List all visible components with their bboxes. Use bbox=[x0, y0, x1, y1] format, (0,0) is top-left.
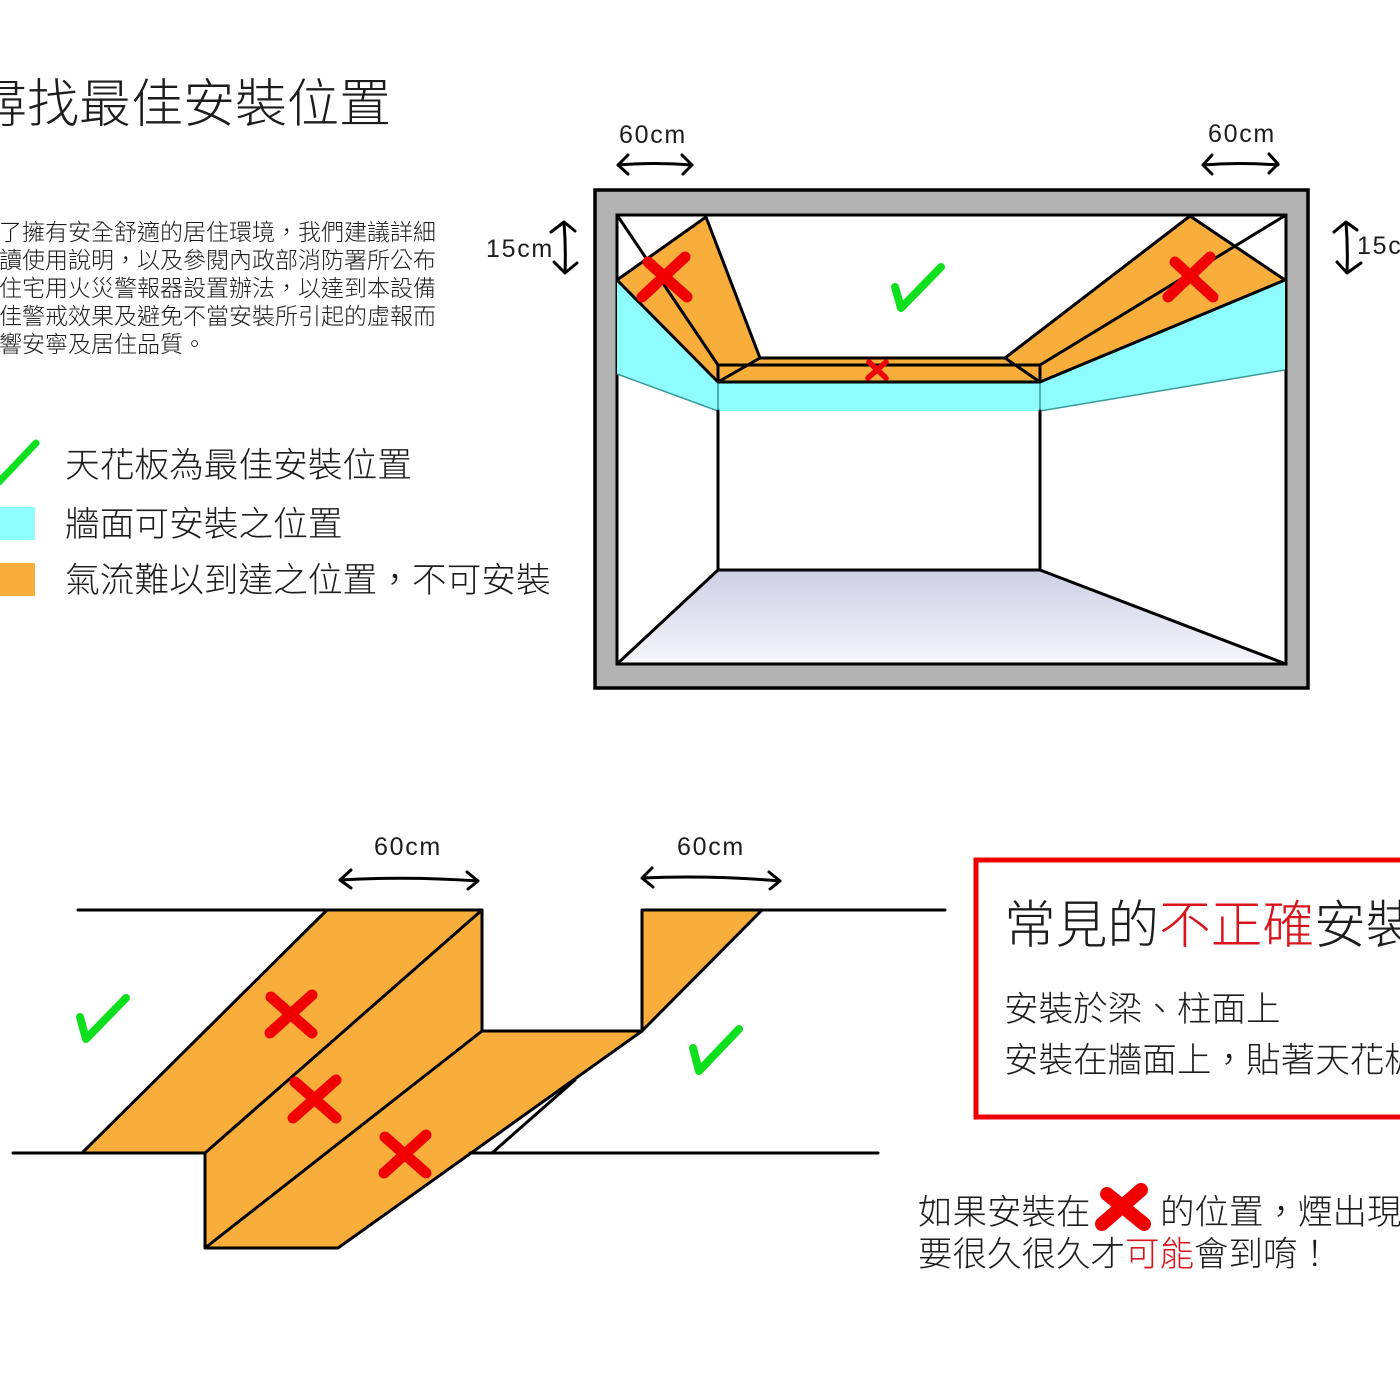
icon: check left bbox=[80, 998, 126, 1039]
beam lines bbox=[13, 910, 945, 1248]
dimension: left 15cm bbox=[486, 222, 577, 273]
icon: cross left bbox=[642, 257, 687, 297]
swatch: wall bbox=[0, 507, 35, 540]
room diagram bbox=[595, 190, 1308, 688]
wall zone cyan bbox=[617, 280, 1285, 411]
intro text block: 響安寧及居住品質。 bbox=[0, 331, 206, 357]
icon: check ceiling bbox=[895, 267, 941, 308]
intro text block: 了擁有安全舒適的居住環境，我們建議詳細 bbox=[0, 219, 436, 245]
room interior bbox=[617, 215, 1286, 664]
dimension: left 15cm: 15cm bbox=[486, 235, 554, 263]
note line 1 end: 的位置，煙出現 bbox=[1160, 1194, 1400, 1232]
intro text block: 讀使用說明，以及參閱內政部消防署所公布 bbox=[0, 247, 436, 273]
beam diagram bbox=[13, 910, 945, 1248]
no-install zone orange bbox=[617, 216, 1285, 382]
icon: cross beam 3 bbox=[384, 1135, 426, 1173]
icon: check right bbox=[693, 1029, 739, 1071]
note text: 如果安裝在 bbox=[918, 1194, 1090, 1232]
dimension: right 15cm bbox=[1334, 222, 1400, 273]
legend bbox=[0, 443, 551, 600]
icon: cross centre bbox=[868, 362, 886, 378]
dimension: beam 60cm right bbox=[642, 833, 780, 889]
dimension: beam 60cm left: 60cm bbox=[374, 833, 442, 861]
swatch: no airflow bbox=[0, 563, 35, 596]
dimension: top right 60cm bbox=[1203, 120, 1278, 174]
orange beam zones bbox=[82, 910, 762, 1248]
floor bbox=[617, 570, 1286, 664]
dimension: top right 60cm: 60cm bbox=[1208, 120, 1276, 148]
wall zone edges bbox=[617, 370, 1285, 411]
note text bbox=[918, 1190, 1400, 1274]
panel line 1: 安裝於梁、柱面上 bbox=[1004, 991, 1281, 1029]
dimension: beam 60cm right: 60cm bbox=[677, 833, 745, 861]
dimension: beam 60cm left bbox=[340, 833, 478, 889]
icon: green check legend bbox=[0, 443, 36, 482]
room frame bbox=[595, 190, 1308, 688]
room lines bbox=[617, 215, 1286, 570]
legend text: ceiling: 天花板為最佳安裝位置 bbox=[65, 447, 412, 485]
icon: cross right bbox=[1168, 257, 1213, 297]
legend text: wall: 牆面可安裝之位置 bbox=[65, 506, 343, 544]
dimension: top left 60cm: 60cm bbox=[619, 121, 687, 149]
panel: common wrong installs bbox=[976, 860, 1400, 1117]
note line 2: 要很久很久才可能會到唷！ bbox=[918, 1236, 1332, 1274]
icon: cross beam 2 bbox=[293, 1080, 336, 1118]
intro text block: 住宅用火災警報器設置辦法，以達到本設備 bbox=[0, 275, 436, 301]
legend text: no airflow: 氣流難以到達之位置，不可安裝 bbox=[65, 562, 551, 600]
dimension: top left 60cm bbox=[618, 121, 692, 174]
intro text block: 佳警戒效果及避免不當安裝所引起的虛報而 bbox=[0, 303, 436, 329]
intro text block bbox=[0, 219, 436, 357]
icon: cross beam 1 bbox=[270, 995, 312, 1033]
icon: cross inline bbox=[1102, 1190, 1144, 1224]
